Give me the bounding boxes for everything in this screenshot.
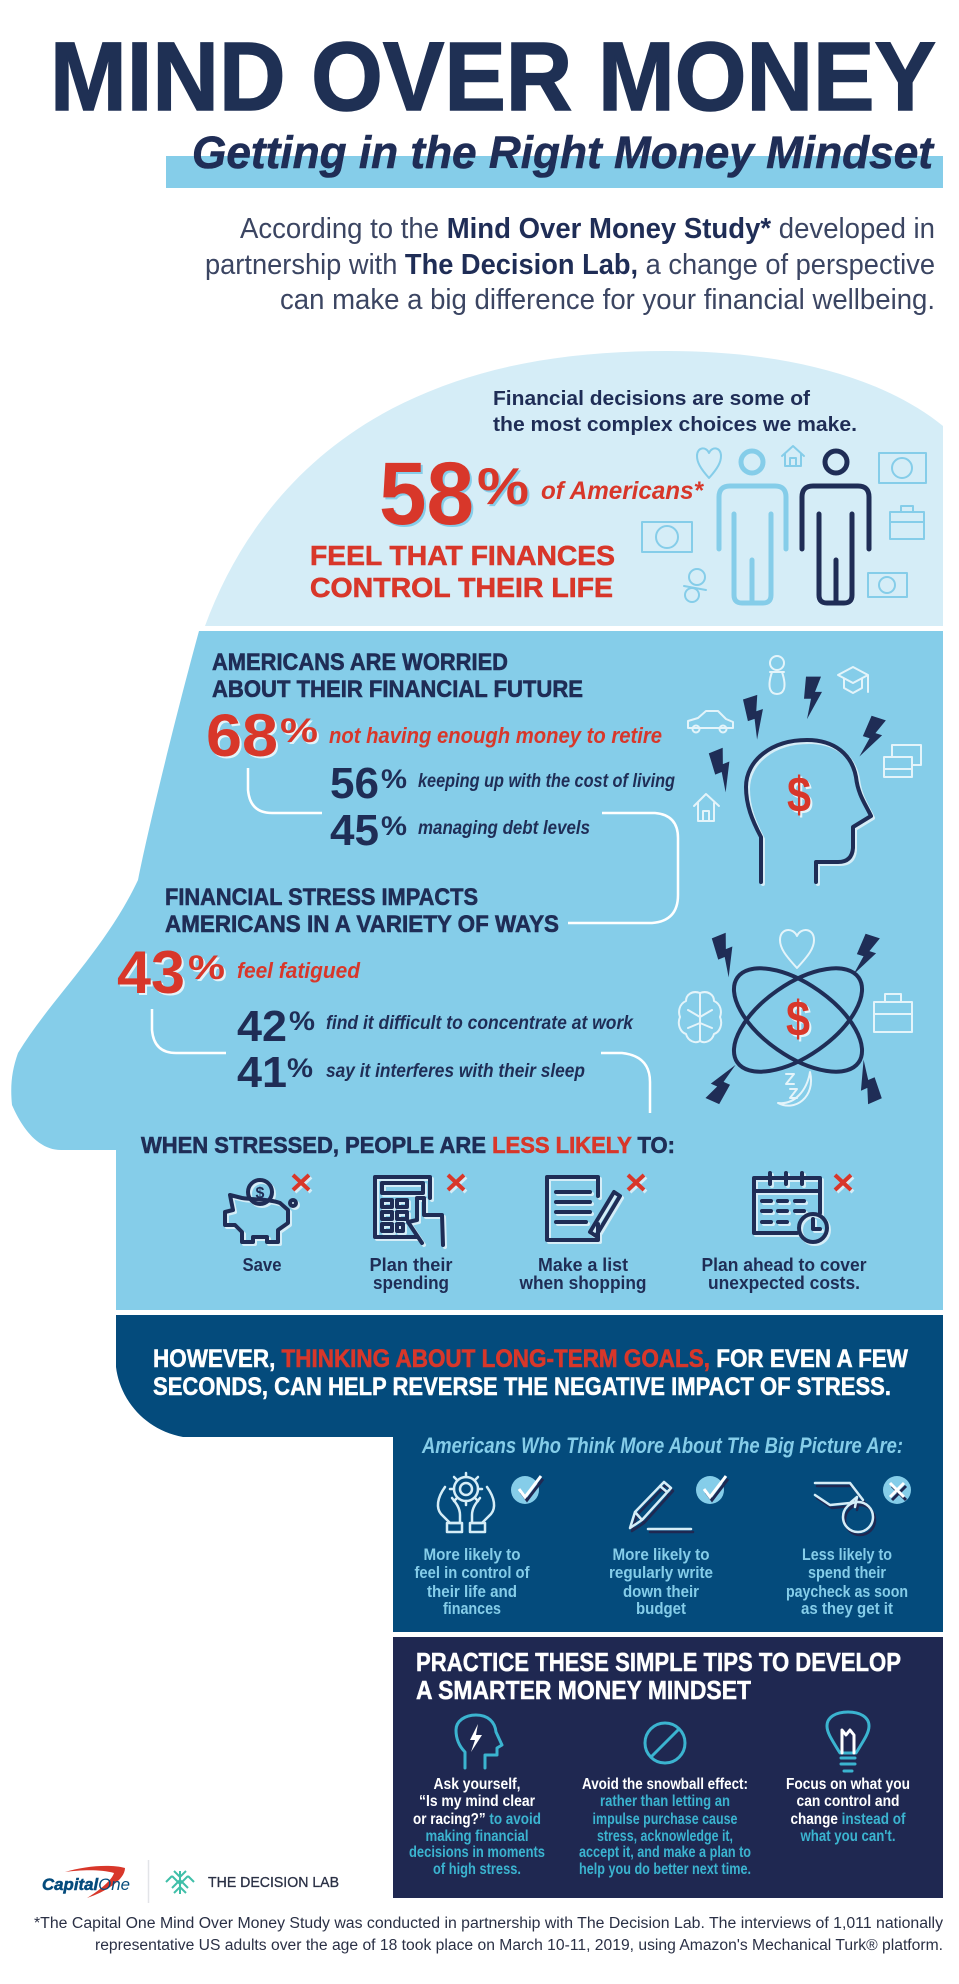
behaviour labels: unexpected costs. xyxy=(708,1273,860,1293)
stat: 56 percent: keeping up with the cost of living xyxy=(418,771,675,792)
heading: worried: ABOUT THEIR FINANCIAL FUTURE xyxy=(212,676,583,703)
logo: The Decision Lab xyxy=(166,1871,339,1894)
heading: however: HOWEVER, THINKING ABOUT LONG-TERM GOALS, FOR EVEN A FEW xyxy=(153,1345,908,1373)
icon: head with bolt xyxy=(456,1715,502,1768)
behaviour labels: Make a list xyxy=(538,1255,628,1275)
tip text: clear mind: or racing?” to avoid xyxy=(413,1811,541,1828)
icon: hands and gear xyxy=(438,1473,541,1532)
icon: prohibition sign xyxy=(645,1723,685,1763)
big picture labels: Less likely to xyxy=(802,1545,892,1564)
stat: 43 percent: feel fatigued xyxy=(237,958,361,983)
tip text: snowball effect: Avoid the snowball effect: xyxy=(582,1776,748,1793)
stat: 41 percent: 41 xyxy=(237,1048,287,1097)
big picture labels: More likely to xyxy=(612,1545,710,1564)
58 percent stat xyxy=(310,443,704,603)
stat: 42 percent: % xyxy=(289,1006,315,1036)
58 percent stat: 58 xyxy=(379,443,474,543)
tip text: clear mind xyxy=(409,1776,545,1878)
behaviour labels: spending xyxy=(373,1273,449,1293)
big picture labels: spend their xyxy=(808,1563,886,1582)
tip text: snowball effect: stress, acknowledge it, xyxy=(597,1828,733,1845)
tip text: focus on control: Focus on what you xyxy=(786,1776,910,1793)
behaviour labels: Plan ahead to cover xyxy=(702,1255,866,1275)
divider between logos xyxy=(148,1860,150,1903)
tip text: snowball effect: accept it, and make a plan to xyxy=(579,1844,751,1861)
connector lines: lower xyxy=(152,1009,650,1113)
icon: calculator xyxy=(375,1175,464,1245)
58 percent stat: CONTROL THEIR LIFE xyxy=(310,572,613,603)
stat: 43 percent xyxy=(117,939,361,1006)
big picture labels xyxy=(414,1545,908,1618)
icon: head with dollar and bolts xyxy=(688,656,921,882)
stat: 41 percent: % xyxy=(287,1053,313,1083)
stat: 42 percent: 42 xyxy=(237,1002,287,1051)
stat: 45 percent: 45 xyxy=(330,806,379,855)
tip text: clear mind: “Is my mind clear xyxy=(419,1793,535,1810)
big picture labels: budget xyxy=(636,1599,686,1618)
icon: list and pen xyxy=(547,1175,644,1240)
complexity statement: the most complex choices we make. xyxy=(493,414,857,436)
panel: head top, 58 percent xyxy=(205,351,943,626)
title: MIND OVER MONEY xyxy=(50,22,936,131)
footnote: *The Capital One Mind Over Money Study was conducted in partnership with The Decision Lab. The interviews of 1,011 nationally xyxy=(34,1915,943,1932)
logo: Capital One: CapitalOne xyxy=(42,1875,130,1894)
stat: 56 percent: % xyxy=(381,764,407,794)
tip text: focus on control: can control and xyxy=(796,1793,900,1810)
icon: navy person xyxy=(802,451,869,603)
stat: 68 percent: % xyxy=(280,712,318,750)
big picture labels: their life and xyxy=(427,1582,517,1601)
stat: 41 percent xyxy=(237,1048,585,1097)
heading: worried: AMERICANS ARE WORRIED xyxy=(212,649,508,676)
stat: 41 percent: say it interferes with their sleep xyxy=(326,1061,585,1082)
section: financial future worries xyxy=(206,649,675,855)
big picture labels: feel in control of xyxy=(414,1563,530,1582)
big picture labels: as they get it xyxy=(801,1599,893,1618)
complexity statement xyxy=(493,388,857,436)
58 percent stat: % xyxy=(477,458,529,516)
icon: light bulb xyxy=(827,1712,869,1771)
heading: worried xyxy=(212,649,583,703)
heading: practice tips xyxy=(416,1647,901,1705)
heading: however xyxy=(153,1345,908,1401)
tip text: snowball effect: impulse purchase cause xyxy=(592,1811,738,1828)
stat: 45 percent: % xyxy=(381,811,407,841)
logo: Capital One xyxy=(42,1866,130,1898)
section: less likely behaviours xyxy=(141,1132,866,1293)
stat: 45 percent: managing debt levels xyxy=(418,818,590,839)
heading: stress impacts: AMERICANS IN A VARIETY OF WAYS xyxy=(165,911,559,938)
tip text: focus on control: change instead of xyxy=(790,1811,906,1828)
stat: 68 percent: not having enough money to retire xyxy=(329,723,662,748)
intro text: partnership with The Decision Lab, a change of perspective xyxy=(205,249,935,281)
heading: stress impacts xyxy=(165,884,559,938)
stat: 68 percent xyxy=(206,702,662,769)
panel: head middle, stress xyxy=(11,631,943,1310)
tip text: clear mind: Ask yourself, xyxy=(434,1776,520,1793)
tip text: focus on control: what you can't. xyxy=(800,1828,896,1845)
intro text xyxy=(205,213,935,316)
behaviour labels xyxy=(242,1255,866,1293)
stat: 42 percent xyxy=(237,1002,634,1051)
58 percent stat: FEEL THAT FINANCES xyxy=(310,540,615,571)
big picture labels: down their xyxy=(623,1582,699,1601)
stat: 42 percent: find it difficult to concentrate at work xyxy=(326,1013,634,1034)
icon: hand and coin xyxy=(815,1476,911,1532)
icon: atom with dollar and bolts xyxy=(679,930,912,1106)
stat: 43 percent: 43 xyxy=(117,939,185,1006)
heading: stress impacts: FINANCIAL STRESS IMPACTS xyxy=(165,884,478,911)
icon: calendar and clock xyxy=(754,1173,851,1242)
tip text: clear mind: making financial xyxy=(426,1828,528,1845)
big picture labels: More likely to xyxy=(424,1545,520,1564)
icon: piggy bank: $ xyxy=(256,1185,265,1202)
tip text: clear mind: of high stress. xyxy=(433,1861,521,1878)
stat: 56 percent: 56 xyxy=(330,759,379,808)
icon: head with dollar and bolts: $ xyxy=(787,767,811,823)
stat: 68 percent: 68 xyxy=(206,702,278,769)
icon: atom with dollar and bolts: $ xyxy=(786,991,810,1047)
behaviour labels: Save xyxy=(242,1255,282,1275)
stat: 43 percent: % xyxy=(188,949,225,987)
connector lines: upper xyxy=(248,768,678,923)
stat: 45 percent xyxy=(330,806,590,855)
footnote: representative US adults over the age of 18 took place on March 10-11, 2019, using Amazon's Mechanical Turk® platform. xyxy=(95,1937,943,1954)
58 percent stat: of Americans* xyxy=(541,477,704,505)
stat: 56 percent xyxy=(330,759,675,808)
tip text: snowball effect xyxy=(579,1776,751,1878)
heading: practice tips: A SMARTER MONEY MINDSET xyxy=(416,1675,751,1705)
icons: life decisions xyxy=(642,446,926,602)
behaviour labels: when shopping xyxy=(519,1273,646,1293)
tip text: clear mind: decisions in moments xyxy=(409,1844,545,1861)
tip text: snowball effect: help you do better next time. xyxy=(579,1861,751,1878)
big picture labels: paycheck as soon xyxy=(786,1582,908,1601)
heading: when stressed: WHEN STRESSED, PEOPLE ARE LESS LIKELY TO: xyxy=(141,1132,675,1158)
big picture labels: finances xyxy=(443,1599,501,1618)
icon: piggy bank xyxy=(225,1175,309,1242)
tip text: snowball effect: rather than letting an xyxy=(600,1793,730,1810)
icon: light blue person xyxy=(719,451,786,603)
tip text: focus on control xyxy=(786,1776,910,1845)
intro text: can make a big difference for your financial wellbeing. xyxy=(280,284,935,316)
footnote xyxy=(34,1915,943,1954)
icon: pen and line xyxy=(630,1476,726,1529)
subtitle banner: Getting in the Right Money Mindset xyxy=(192,127,935,178)
panel: simple tips xyxy=(393,1637,943,1898)
complexity statement: Financial decisions are some of xyxy=(493,388,810,410)
section: impacts of stress xyxy=(117,884,634,1097)
panel: long-term goals xyxy=(116,1315,943,1632)
intro text: According to the Mind Over Money Study* developed in xyxy=(240,213,935,245)
big picture labels: regularly write xyxy=(609,1563,713,1582)
logo: The Decision Lab: THE DECISION LAB xyxy=(208,1874,339,1891)
behaviour labels: Plan their xyxy=(370,1255,452,1275)
